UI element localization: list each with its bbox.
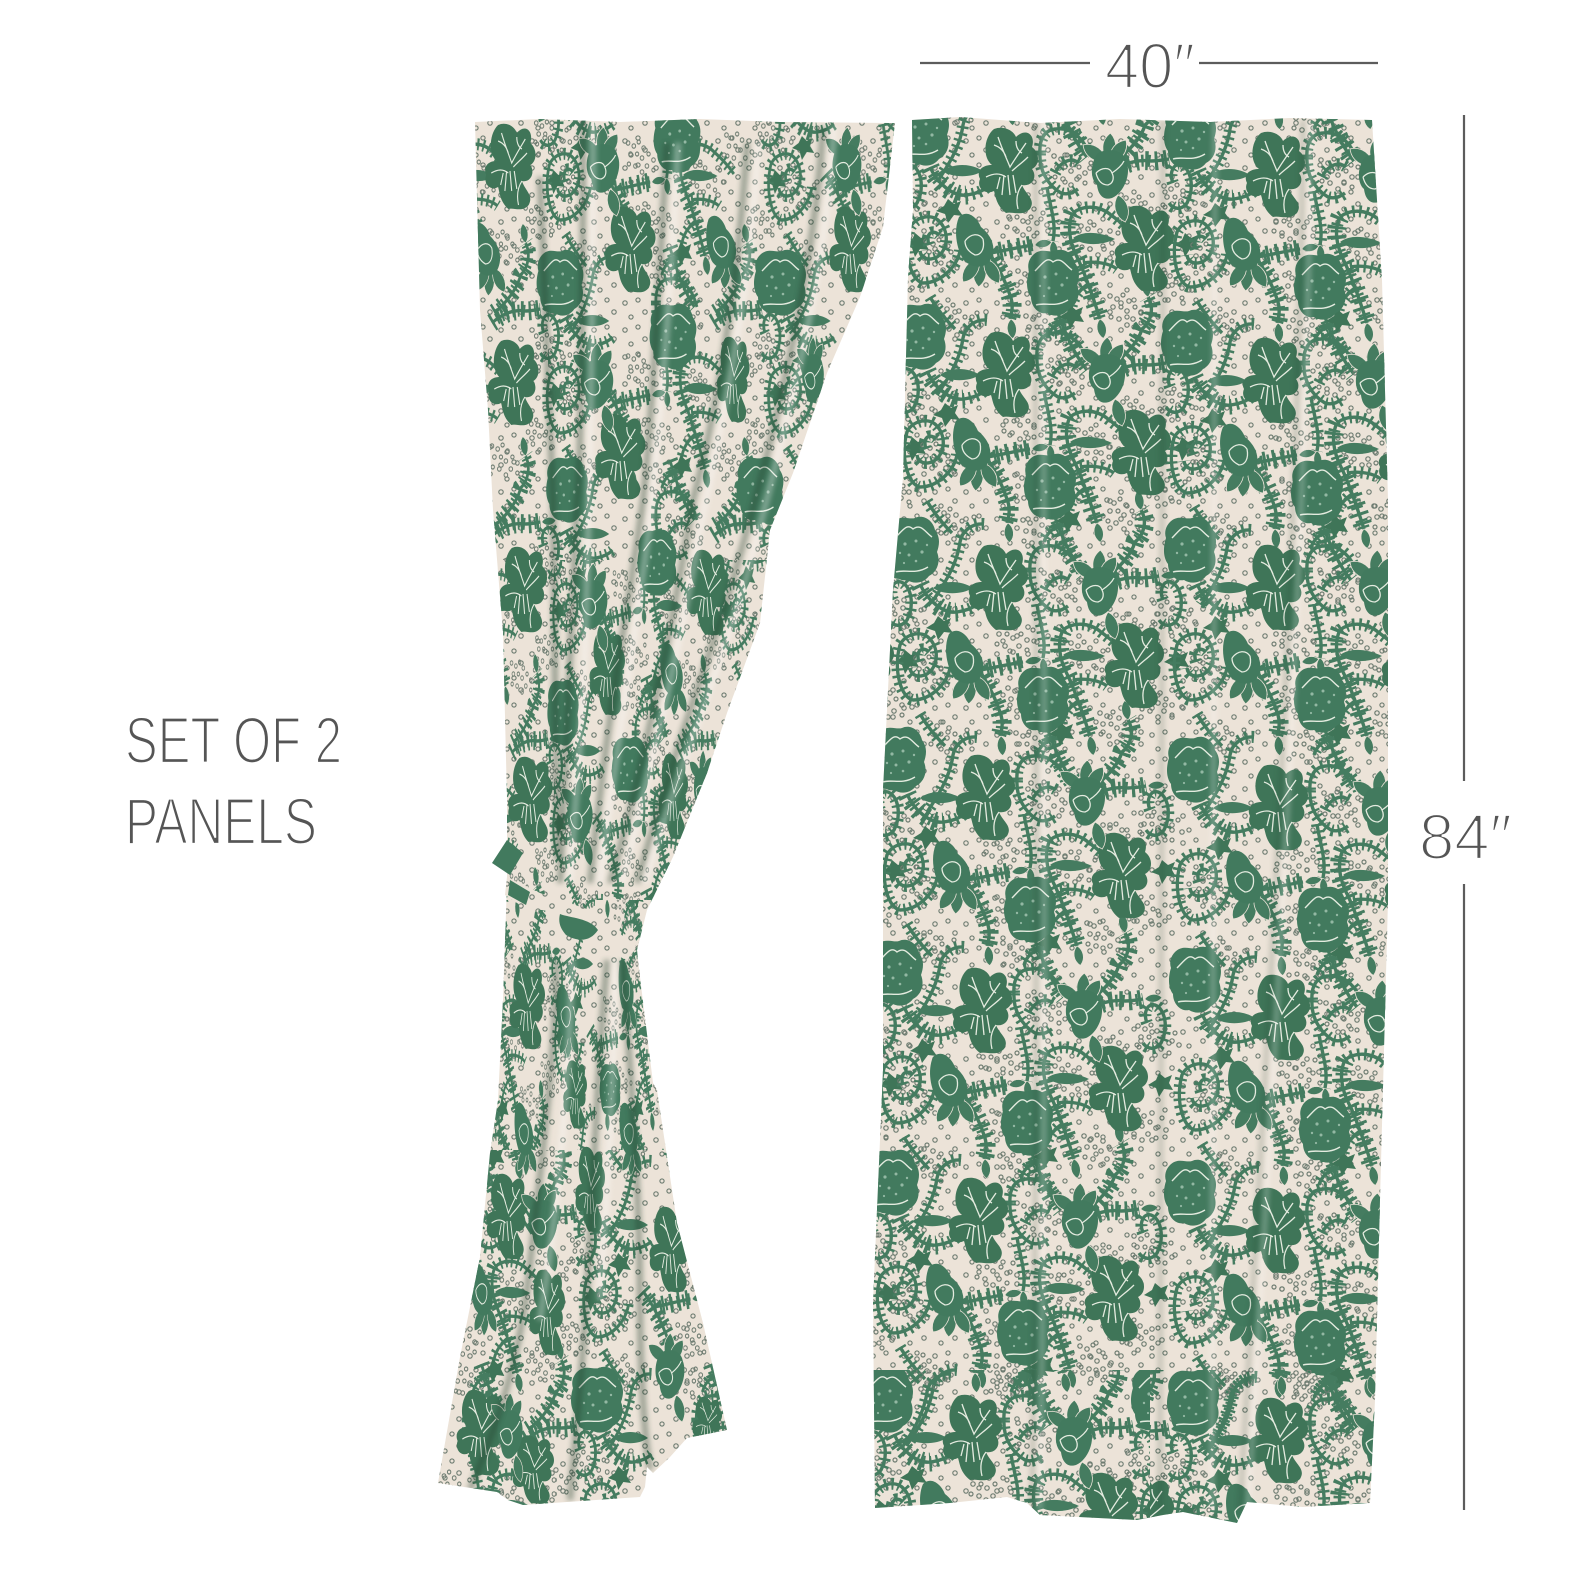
tieback tab bbox=[492, 840, 523, 875]
right curtain dot ground bbox=[860, 110, 1400, 1530]
label: set of 2 panels: PANELS bbox=[125, 784, 317, 858]
right curtain fold highlights bbox=[1040, 120, 1311, 1510]
left curtain vine print bbox=[430, 110, 910, 1520]
right curtain floral motifs bbox=[874, 118, 1388, 1520]
left curtain dot ground bbox=[430, 110, 910, 1520]
left curtain panel, gathered bbox=[430, 107, 910, 1520]
right curtain vine print bbox=[873, 117, 1388, 1520]
tieback flower print bbox=[508, 880, 598, 940]
tieback dots bbox=[505, 877, 637, 960]
label: set of 2 panels: SET OF 2 bbox=[125, 703, 342, 777]
left curtain fold highlights bbox=[540, 120, 834, 1320]
right curtain fold shadows bbox=[1032, 120, 1303, 1510]
right curtain bottom band print bbox=[860, 1370, 1390, 1530]
left curtain fabric base bbox=[430, 110, 910, 1520]
right curtain panel, flat bbox=[873, 117, 1388, 1523]
tieback band bbox=[492, 840, 637, 960]
width dimension: 40 inches: 40″ bbox=[1105, 30, 1195, 102]
left curtain floral motifs bbox=[457, 107, 871, 1504]
left curtain fold shadows bbox=[470, 120, 823, 1500]
tieback strip bbox=[505, 877, 637, 960]
height dimension: 84 inches: 84″ bbox=[1419, 801, 1512, 873]
label: set of 2 panels bbox=[125, 703, 342, 858]
right curtain fabric base bbox=[860, 110, 1400, 1530]
